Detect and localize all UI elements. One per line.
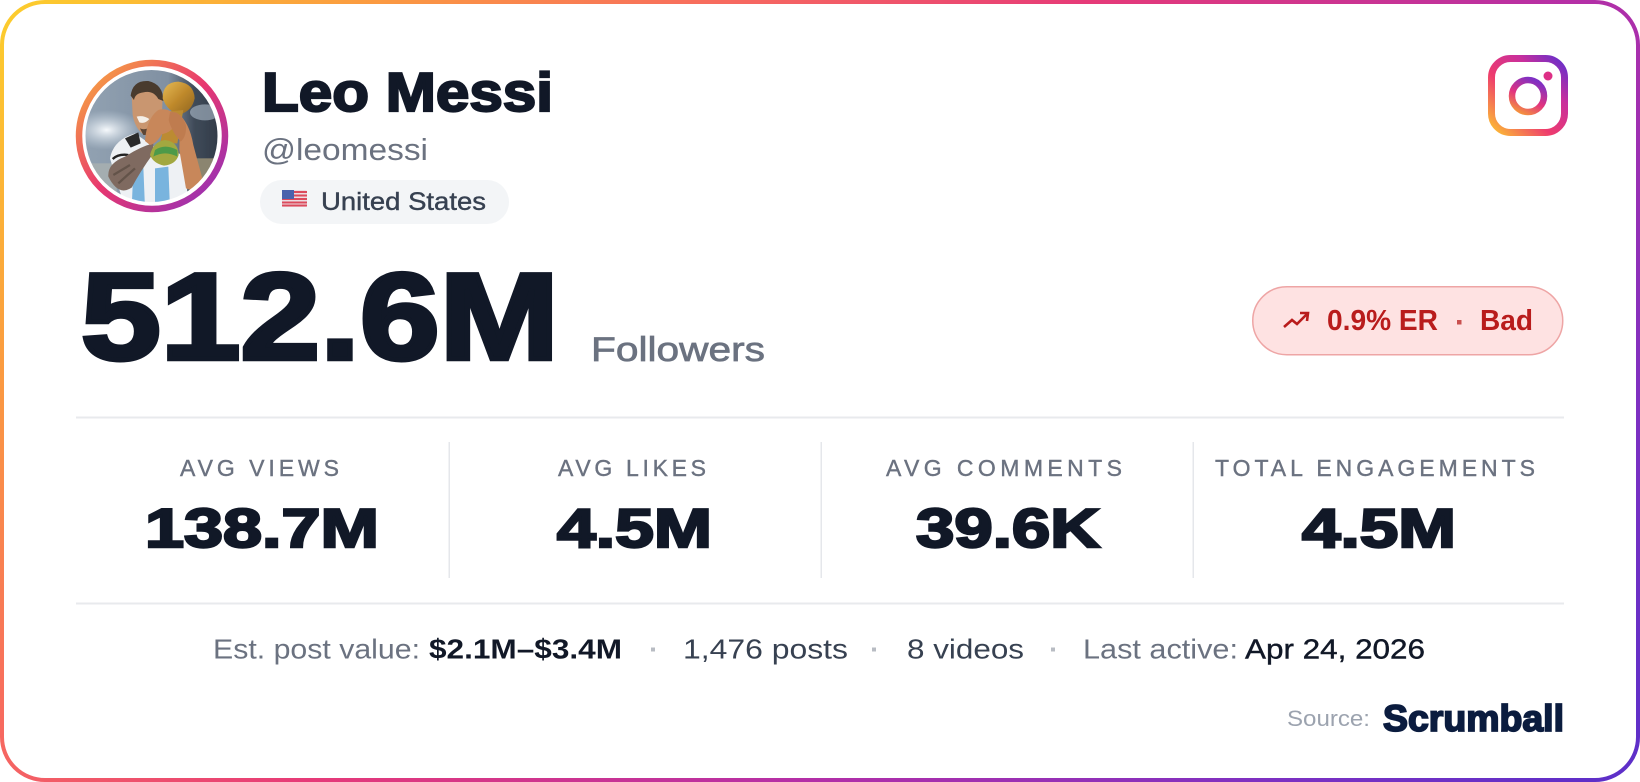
source attribution: Source: (1287, 706, 1370, 731)
logo: Scrumball: Scrumball (1383, 698, 1564, 739)
stat: avg likes (557, 455, 712, 559)
footer meta row: Last active: (1083, 634, 1238, 664)
engagement rate value: 0.9% ER (1327, 305, 1438, 337)
stat: total engagements: TOTAL ENGAGEMENTS (1215, 455, 1535, 481)
stat: total engagements (1215, 455, 1535, 559)
stat: avg comments: 39.6K (916, 497, 1100, 559)
stat: avg views: AVG VIEWS (180, 455, 339, 481)
stat: avg views: 138.7M (145, 497, 379, 559)
footer meta row: 8 videos (907, 634, 1024, 664)
stat: avg comments: AVG COMMENTS (886, 455, 1122, 481)
stat: avg likes: 4.5M (557, 497, 712, 559)
country pill (260, 180, 509, 224)
follower count: 512.6M (81, 249, 559, 386)
footer meta row: 1,476 posts (683, 634, 848, 664)
country name: United States (321, 188, 486, 216)
handle: @leomessi (262, 132, 428, 167)
footer meta row (213, 634, 1425, 664)
engagement rate badge (1253, 287, 1563, 355)
followers label: Followers (591, 331, 765, 369)
stat: avg comments (886, 455, 1122, 559)
icon: trend arrow (1284, 313, 1308, 327)
avatar with gradient ring (70, 63, 227, 212)
icon: US flag (282, 190, 307, 207)
icon: Instagram (1492, 58, 1564, 132)
source attribution (1287, 698, 1564, 739)
separator dot (1457, 320, 1462, 324)
rating: Bad (1480, 305, 1533, 337)
footer meta row: $2.1M–$3.4M (429, 634, 622, 664)
stat: total engagements: 4.5M (1302, 497, 1456, 559)
name: Leo Messi (262, 61, 553, 123)
stat: avg views (145, 455, 379, 559)
footer meta row: Apr 24, 2026 (1245, 634, 1425, 664)
stat: avg likes: AVG LIKES (558, 455, 706, 481)
footer meta row: Est. post value: (213, 634, 420, 664)
